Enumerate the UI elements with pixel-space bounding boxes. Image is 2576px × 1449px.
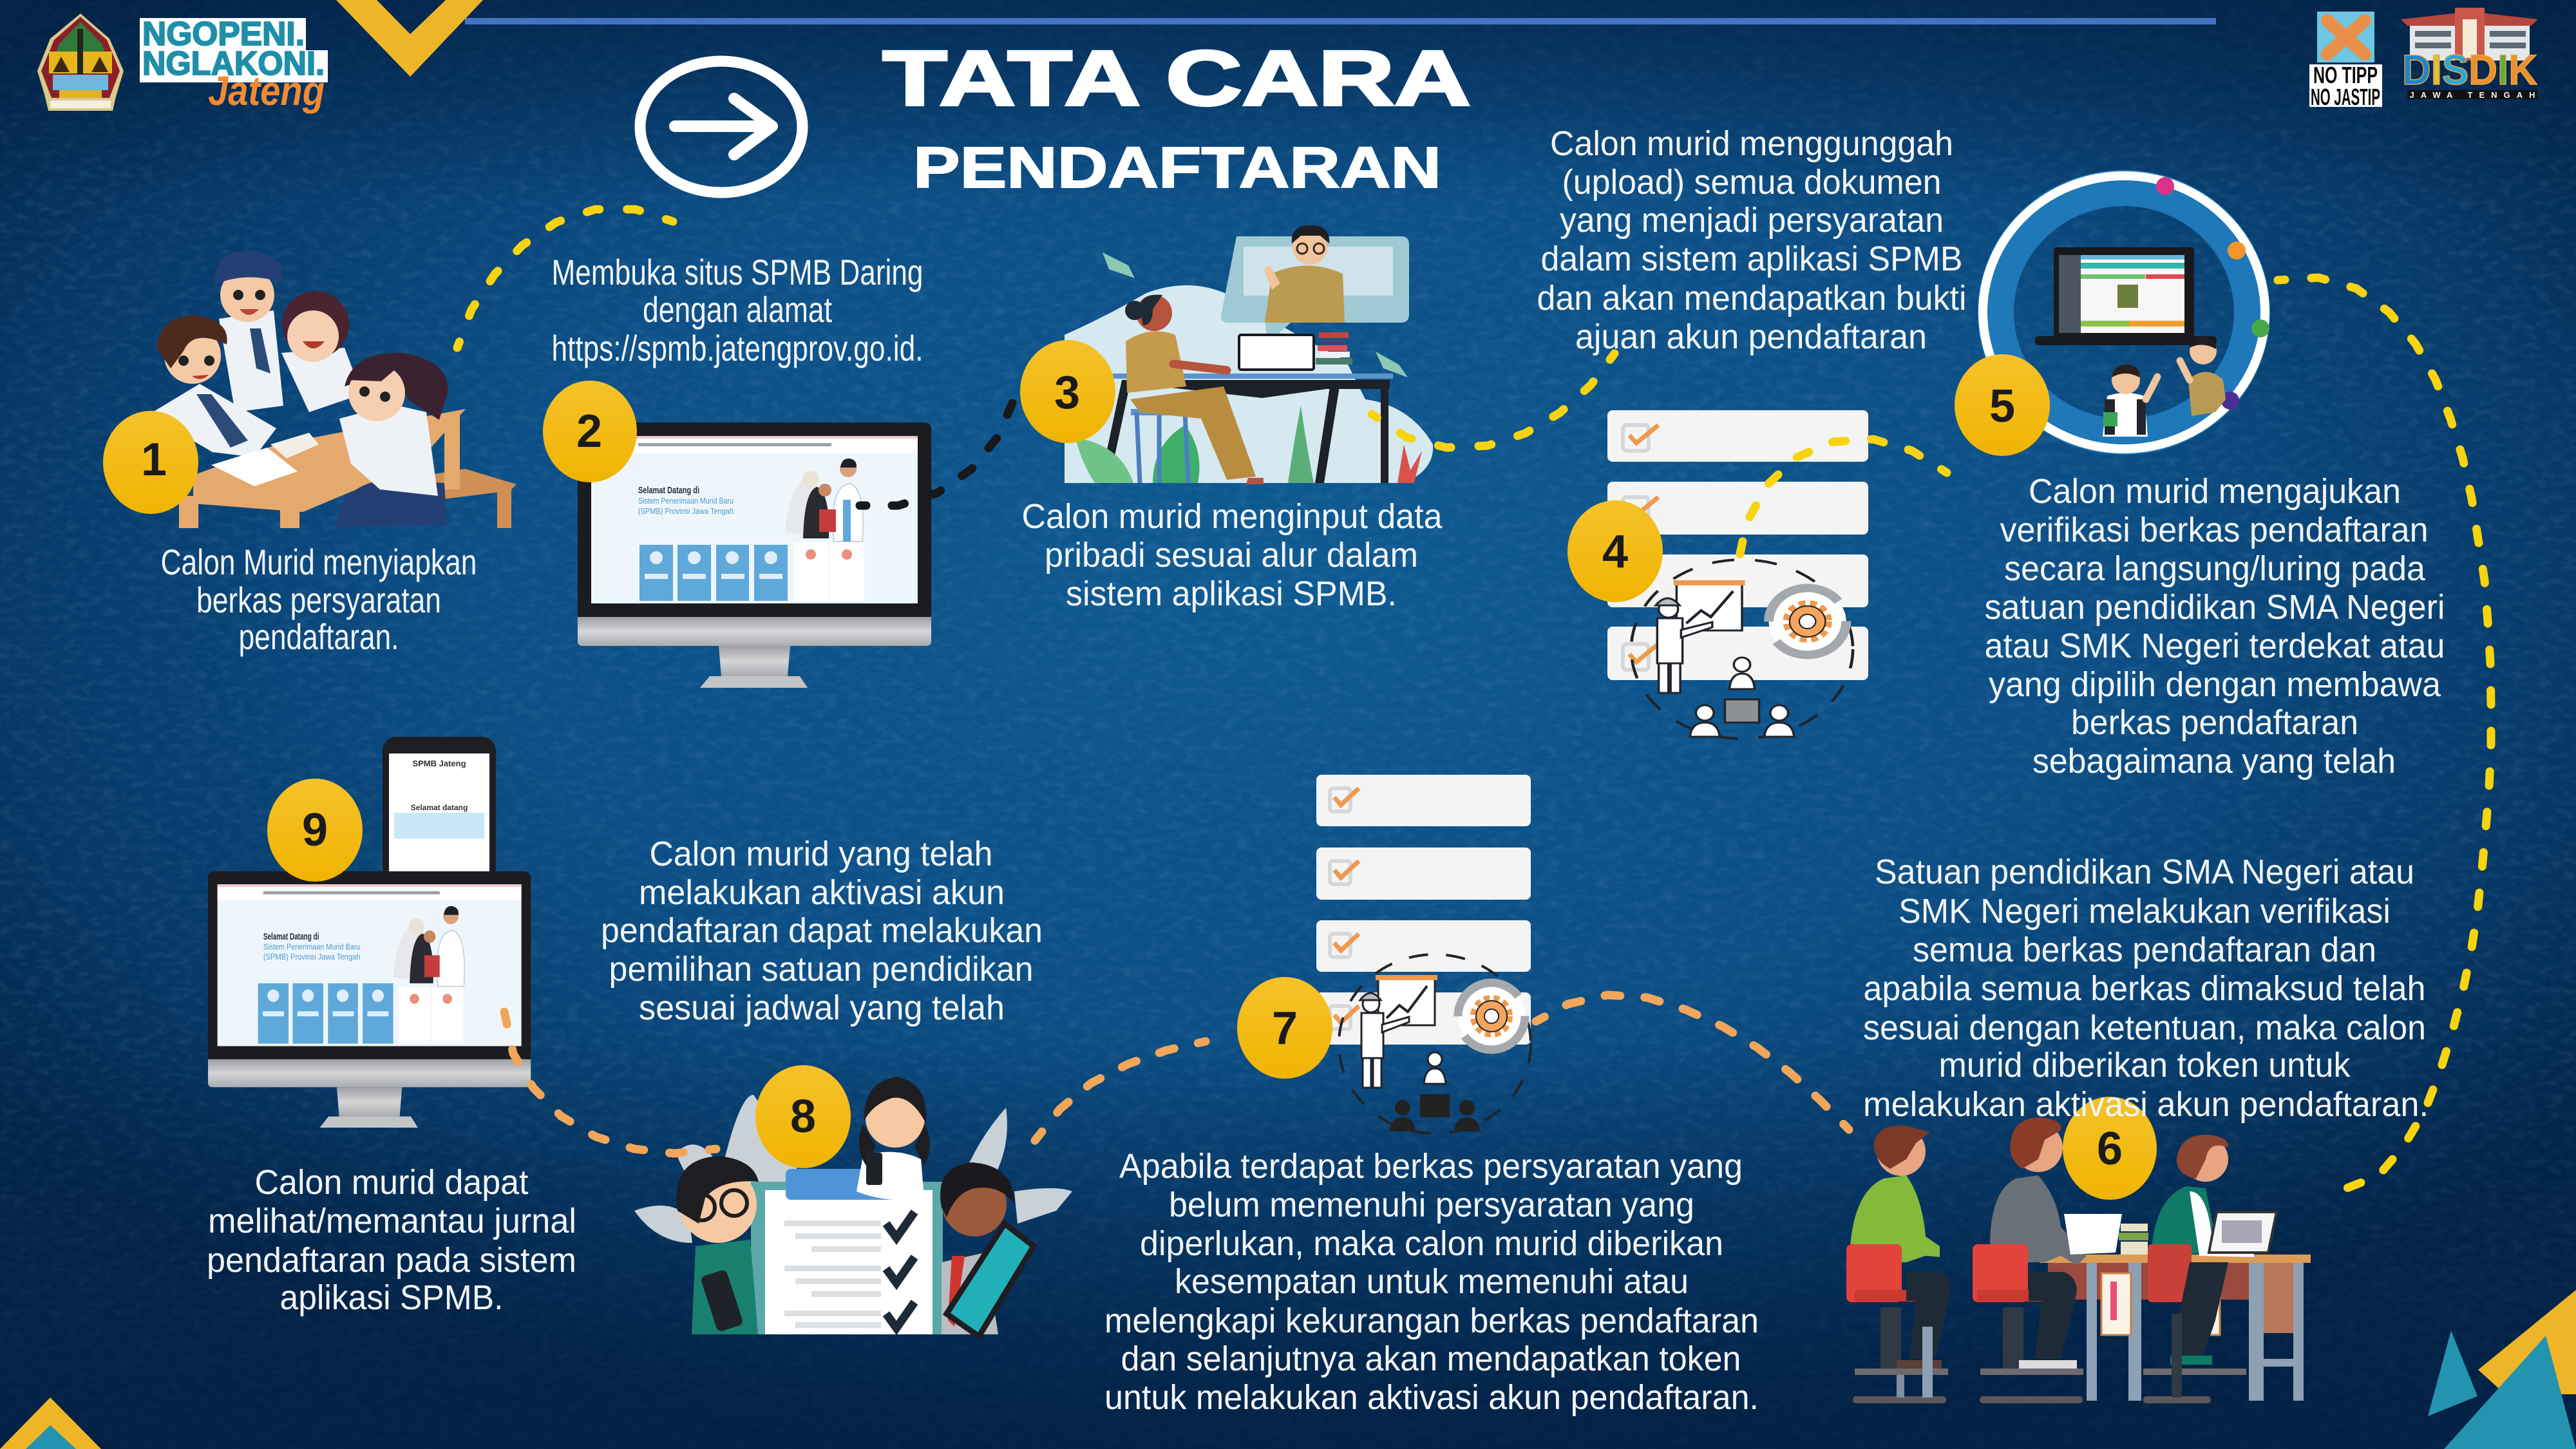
text block: step 7: untuk melakukan aktivasi akun pendaftaran.	[1104, 1378, 1759, 1417]
logo: No Tipp No Jastip: NO JASTIP	[2311, 84, 2380, 110]
text block: step 7	[1104, 1147, 1759, 1417]
text block: step 4: Calon murid menggunggah	[1550, 124, 1953, 163]
text block: step 8: pendaftaran dapat melakukan	[601, 911, 1043, 950]
text block: step 7: dan selanjutnya akan mendapatkan token	[1121, 1340, 1741, 1378]
text block: step 5: secara langsung/luring pada	[2004, 549, 2426, 588]
badge 7	[1237, 977, 1332, 1079]
text block: step 6: SMK Negeri melakukan verifikasi	[1899, 892, 2391, 931]
badge 8: 8	[790, 1091, 816, 1142]
logo: Ngopeni Nglakoni Jateng	[140, 15, 328, 114]
badge 1: 1	[141, 434, 167, 486]
decoration: top chevron	[336, 0, 483, 77]
logo: Ngopeni Nglakoni Jateng: NGOPENI.	[142, 15, 305, 53]
illustration 2: desktop monitor with SPMB site: Selamat Datang di	[638, 485, 699, 496]
text block: step 8: pemilihan satuan pendidikan	[609, 950, 1033, 989]
decoration: bottom-right triangles	[2428, 1290, 2576, 1449]
text block: step 6: melakukan aktivasi akun pendaftaran.	[1863, 1085, 2429, 1124]
badge 2: 2	[576, 406, 602, 457]
illustration 6: students at desks	[1846, 1117, 2311, 1403]
text block: step 7: Apabila terdapat berkas persyaratan yang	[1119, 1147, 1743, 1186]
text block: step 1: pendaftaran.	[238, 616, 399, 657]
text block: step 1: berkas persyaratan	[196, 580, 441, 620]
illustration 9: desktop monitor with SPMB site	[208, 871, 531, 1128]
badge 6: 6	[2097, 1123, 2123, 1175]
plants	[1075, 406, 1422, 483]
desktop monitor	[1239, 335, 1314, 370]
man on screen	[1264, 225, 1345, 323]
illustration 1: students at table	[153, 251, 516, 528]
decoration: bottom-left triangle	[0, 1397, 101, 1449]
text block: step 9: aplikasi SPMB.	[279, 1278, 504, 1317]
text block: step 3: sistem aplikasi SPMB.	[1066, 574, 1397, 613]
student grey shirt	[1973, 1117, 2087, 1403]
dashed arrow: step 2 to 3	[860, 400, 1014, 506]
text block: step 7: diperlukan, maka calon murid diberikan	[1140, 1224, 1723, 1263]
text block: step 6: murid diberikan token untuk	[1938, 1046, 2351, 1084]
dashed arrow: step 6 to 7	[1536, 995, 1849, 1130]
student green sweater	[1846, 1126, 1951, 1403]
text block: step 5: satuan pendidikan SMA Negeri	[1985, 588, 2445, 627]
illustration 9: phone behind monitor: SPMB Jateng	[412, 759, 466, 768]
text block: step 8: melakukan aktivasi akun	[639, 873, 1005, 912]
text block: step 5: sebagaimana yang telah	[2032, 742, 2396, 781]
text block: step 9: melihat/memantau jurnal	[208, 1202, 576, 1240]
logo: Jawa Tengah crest	[37, 14, 124, 111]
badge 8	[755, 1065, 851, 1168]
clipboard	[751, 1169, 943, 1334]
badge 5	[1955, 354, 2050, 456]
dashed arrow: step 4 to 5	[1739, 439, 1947, 560]
text block: step 2: Membuka situs SPMB Daring	[551, 252, 923, 292]
dashed arrow: step 8 to 9	[504, 1012, 716, 1153]
text block: step 9: Calon murid dapat	[255, 1163, 528, 1202]
text block: step 8: sesuai jadwal yang telah	[639, 989, 1005, 1027]
badge 4: 4	[1602, 526, 1628, 578]
masks	[1103, 252, 1135, 278]
logo: Ngopeni Nglakoni Jateng: Jateng	[208, 68, 325, 114]
woman typing	[1125, 295, 1264, 484]
text block: step 4: dan akan mendapatkan bukti	[1537, 279, 1967, 317]
girl laughing	[281, 291, 362, 412]
text block: step 9: pendaftaran pada sistem	[207, 1241, 576, 1280]
illustration 4: checklist rows	[1607, 410, 1868, 680]
text block: step 1	[161, 542, 477, 657]
gear cycle	[1769, 588, 1846, 655]
presentation board	[1376, 975, 1437, 1025]
text block: step 2	[551, 252, 923, 368]
badge 3: 3	[1054, 367, 1080, 419]
illustration 9: desktop monitor with SPMB site: Sistem Penerimaan Murid Baru	[263, 942, 360, 952]
text block: step 4: ajuan akun pendaftaran	[1575, 317, 1927, 356]
student with cap	[214, 251, 283, 412]
text block: step 4: yang menjadi persyaratan	[1560, 201, 1944, 240]
text block: step 5	[1985, 472, 2445, 781]
text block: step 9	[207, 1163, 576, 1317]
boy with glasses	[676, 1156, 759, 1334]
illustration 5: laptop in ring	[1983, 176, 2269, 449]
text block: step 8	[601, 835, 1043, 1027]
team	[1690, 658, 1794, 737]
books	[1316, 332, 1352, 365]
illustration 9: phone behind monitor: Selamat datang	[411, 803, 468, 812]
boy with tablet	[940, 1162, 1034, 1336]
text block: step 1: Calon Murid menyiapkan	[161, 542, 477, 582]
illustration 7: checklist rows	[1316, 775, 1531, 1045]
boy writing	[153, 316, 276, 457]
badge 2	[543, 381, 637, 482]
dashed arrow: step 7 to 8	[1035, 1041, 1206, 1141]
engineer	[1656, 598, 1712, 693]
dashed arrow: step 3 to 4	[1372, 354, 1615, 448]
text block: step 2: dengan alamat	[643, 289, 832, 330]
text block: step 6: semua berkas pendaftaran dan	[1913, 931, 2376, 969]
speech bubble	[1221, 236, 1409, 344]
icon 7: presenter, gear and team	[1339, 954, 1531, 1133]
illustration 2: desktop monitor with SPMB site: Sistem Penerimaan Murid Baru	[638, 496, 734, 506]
icon 4: presenter, gear and team	[1631, 560, 1853, 739]
badge 3	[1020, 340, 1115, 443]
illustration 9: phone behind monitor	[383, 737, 496, 882]
logo: Disdik Jawa Tengah: DISDIK	[2402, 46, 2537, 93]
dashed arrow: step 1 to 2	[457, 209, 673, 348]
laptop 2	[2064, 1214, 2122, 1255]
illustration 2: desktop monitor with SPMB site	[578, 422, 931, 688]
text block: step 7: belum memenuhi persyaratan yang	[1169, 1186, 1694, 1224]
leaves	[634, 1095, 1072, 1243]
text block: step 6: Satuan pendidikan SMA Negeri atau	[1875, 853, 2414, 891]
illustration 3: online desk scene	[1065, 225, 1433, 484]
text block: step 7: kesempatan untuk memenuhi atau	[1175, 1262, 1689, 1301]
illustration 9: desktop monitor with SPMB site: Selamat Datang di	[263, 931, 319, 942]
title: TATA CARA	[882, 34, 1471, 122]
student green vest	[2143, 1135, 2254, 1403]
text block: step 3: pribadi sesuai alur dalam	[1045, 536, 1418, 574]
text block: step 2: https://spmb.jatengprov.go.id.	[551, 328, 923, 368]
text block: step 5: berkas pendaftaran	[2071, 703, 2358, 742]
girl with ponytail	[336, 353, 448, 527]
teacher	[2180, 337, 2226, 416]
text block: step 4	[1537, 124, 1967, 356]
text block: step 6	[1863, 853, 2429, 1124]
boy student	[2103, 365, 2157, 437]
top rule	[465, 18, 2216, 24]
text block: step 3: Calon murid menginput data	[1021, 497, 1443, 536]
text block: step 5: Calon murid mengajukan	[2029, 472, 2401, 511]
logo: No Tipp No Jastip	[2309, 12, 2382, 110]
text block: step 5: atau SMK Negeri terdekat atau	[1985, 627, 2445, 665]
illustration 2: desktop monitor with SPMB site: (SPMB) Provinsi Jawa Tengah	[638, 506, 734, 516]
text block: step 6: sesuai dengan ketentuan, maka calon	[1863, 1009, 2426, 1047]
desk	[2040, 1255, 2311, 1401]
desk	[1100, 374, 1393, 483]
team	[1390, 1052, 1480, 1132]
badge 7: 7	[1272, 1003, 1298, 1054]
text block: step 8: Calon murid yang telah	[649, 835, 993, 873]
badge 4	[1567, 500, 1663, 602]
title: PENDAFTARAN	[913, 136, 1441, 200]
illustration 9: desktop monitor with SPMB site: (SPMB) Provinsi Jawa Tengah	[263, 952, 360, 961]
text block: step 5: verifikasi berkas pendaftaran	[2000, 511, 2428, 549]
paper	[211, 448, 298, 486]
logo: Disdik Jawa Tengah	[2401, 8, 2538, 100]
books and laptop	[2119, 1212, 2277, 1255]
text block: step 3	[1021, 497, 1443, 613]
text block: step 7: melengkapi kekurangan berkas pendaftaran	[1104, 1302, 1759, 1340]
title	[882, 34, 1471, 200]
badge 9	[267, 779, 363, 882]
table	[179, 409, 466, 528]
icon: arrow in circle	[640, 61, 802, 193]
text block: step 4: (upload) semua dokumen	[1562, 163, 1941, 202]
dashed arrow: step 5 to 6	[2278, 278, 2491, 1190]
bench	[412, 469, 516, 528]
colored dots	[2156, 177, 2269, 410]
text block: step 6: apabila semua berkas dimaksud telah	[1864, 969, 2425, 1008]
engineer	[1360, 993, 1409, 1088]
badge 1	[103, 411, 198, 514]
text block: step 5: yang dipilih dengan membawa	[1989, 665, 2441, 704]
logo: Ngopeni Nglakoni Jateng: NGLAKONI.	[142, 45, 325, 82]
presentation board	[1674, 580, 1745, 630]
text block: step 4: dalam sistem aplikasi SPMB	[1540, 240, 1963, 278]
badge 9: 9	[302, 804, 328, 856]
logo: No Tipp No Jastip: NO TIPP	[2313, 62, 2378, 88]
badge 5: 5	[1989, 381, 2015, 432]
gear cycle	[1458, 983, 1525, 1050]
badge 6	[2063, 1097, 2157, 1200]
girl with phone	[857, 1077, 930, 1200]
laptop	[2035, 247, 2217, 345]
logo: Disdik Jawa Tengah: JAWA TENGAH	[2410, 90, 2535, 100]
illustration 8: students with checklist	[634, 1077, 1072, 1336]
